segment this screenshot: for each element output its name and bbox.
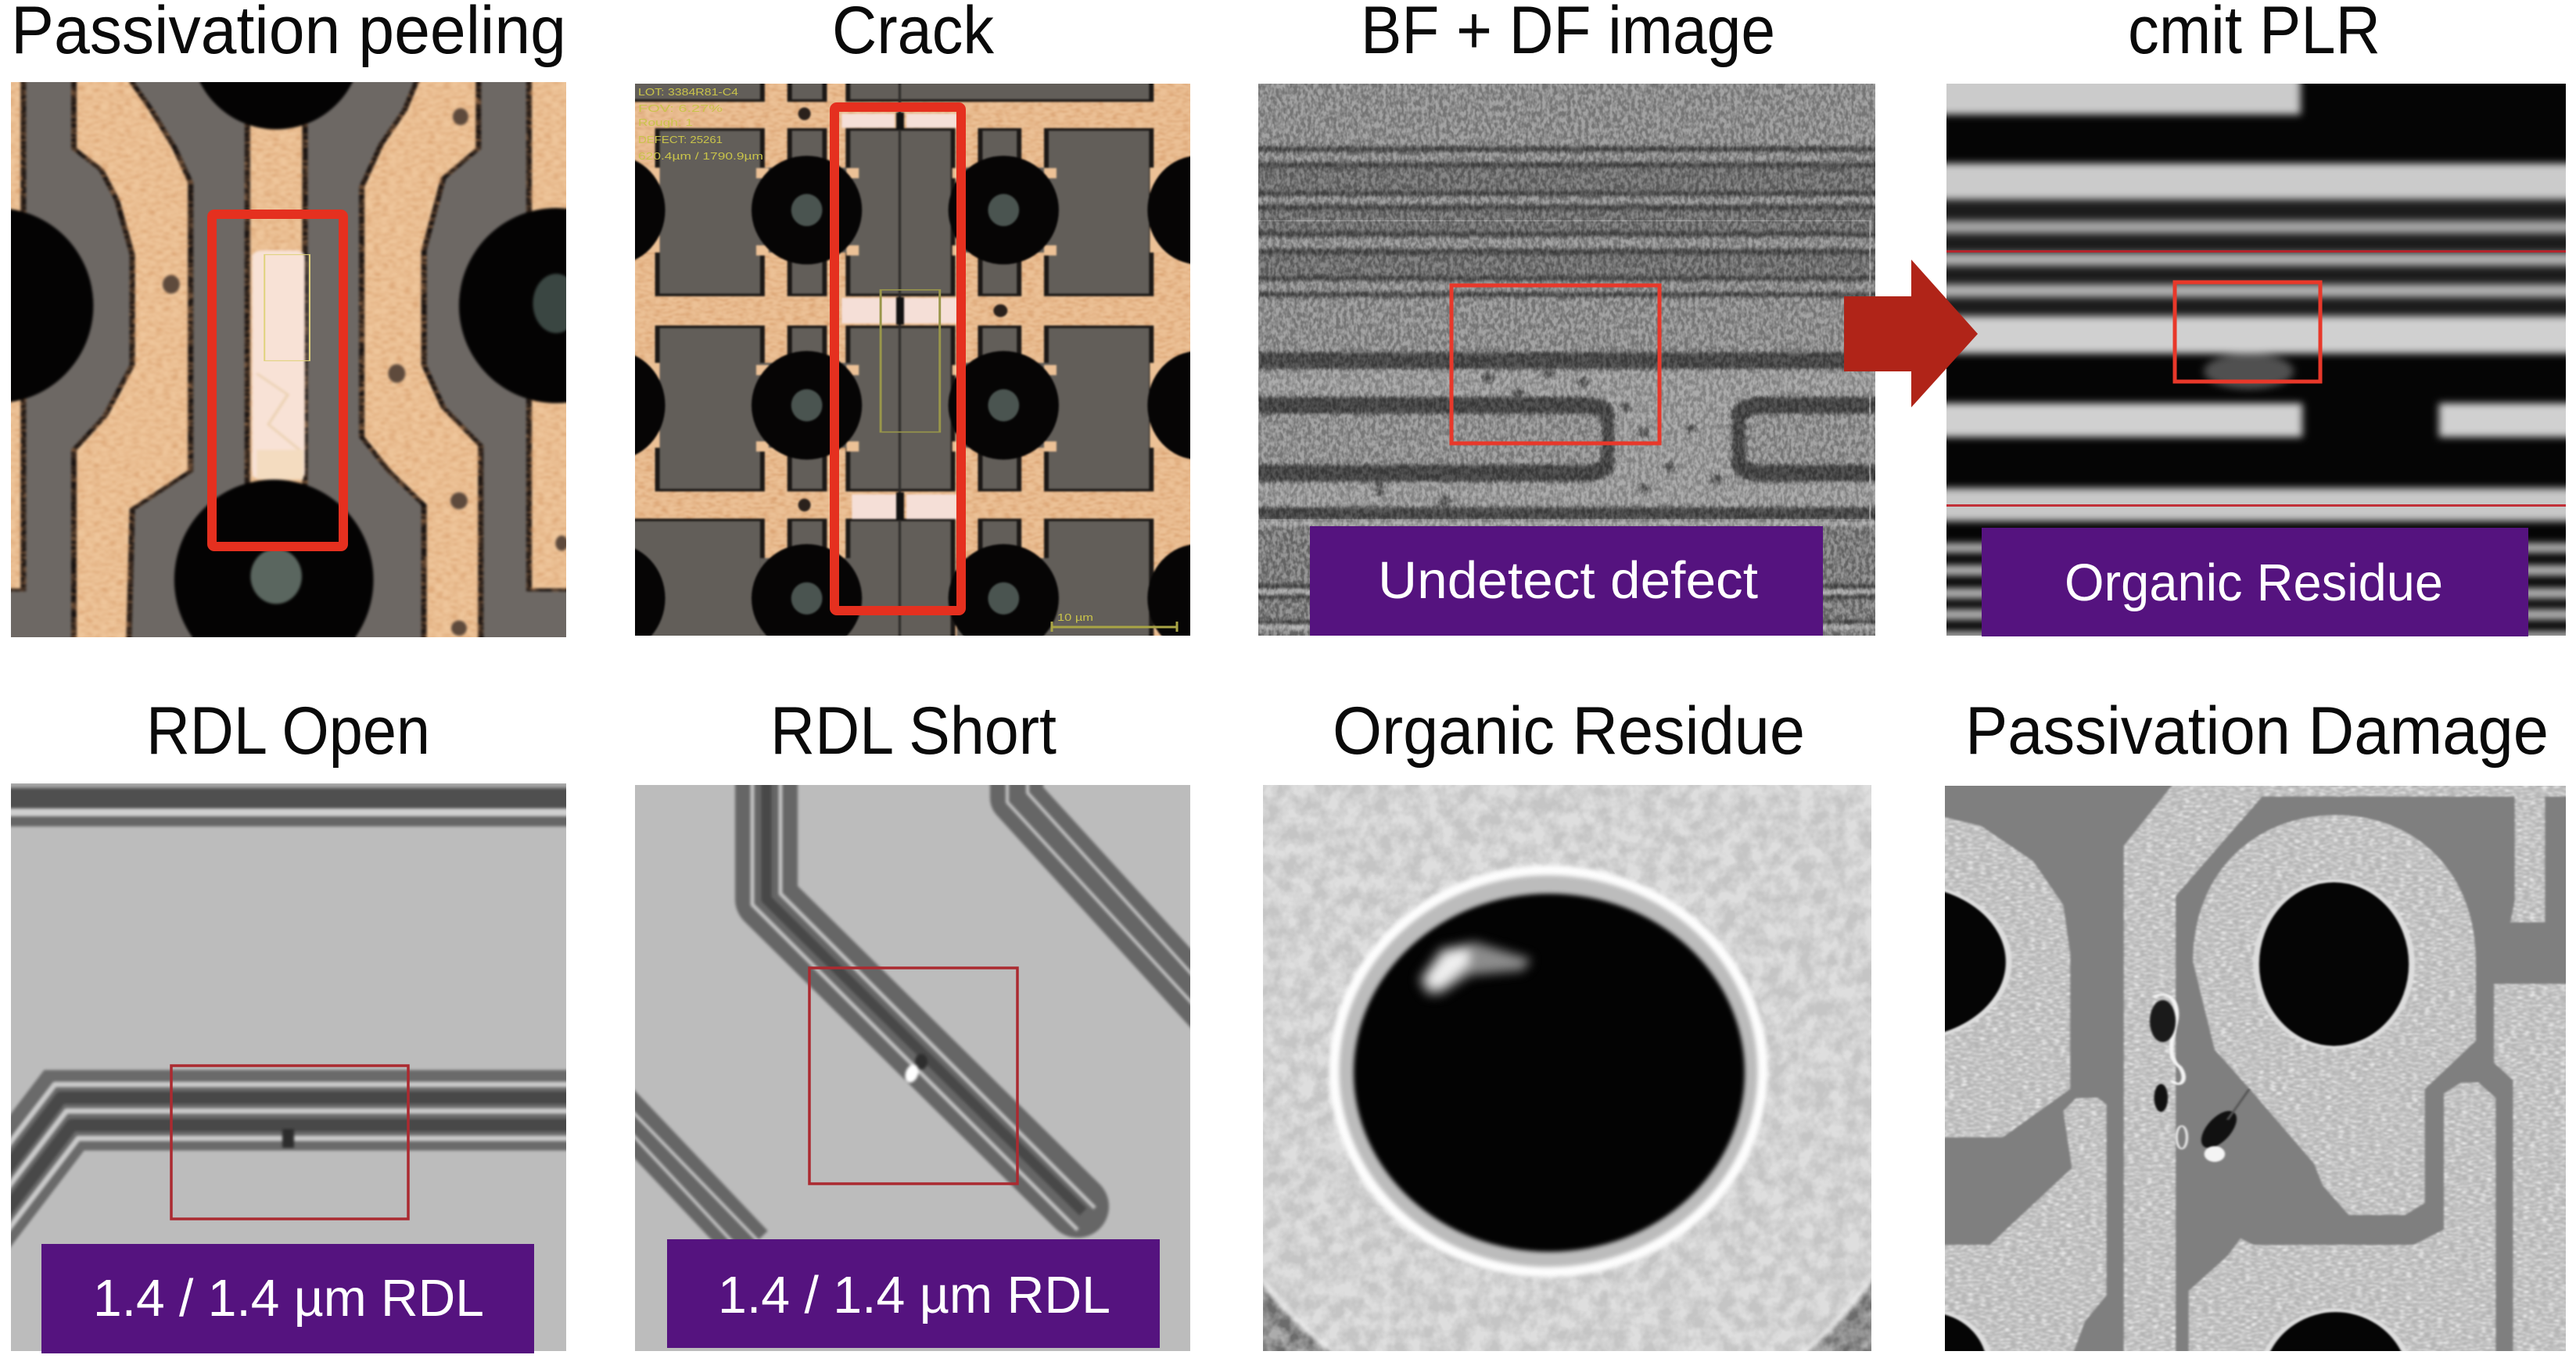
purple label: 1.4 / 1.4 µm RDL <box>41 1244 534 1353</box>
overlay: inspection metadata: DEFECT: 25261 <box>638 134 723 145</box>
red highlight box <box>212 214 343 547</box>
overlay: inspection metadata: FOV: 6.27% <box>638 102 723 114</box>
micrograph: SEM traces with damaged passivation <box>1798 769 2574 1357</box>
residue streak <box>1419 942 1531 995</box>
purple label: 1.4 / 1.4 µm RDL: 1.4 / 1.4 µm RDL <box>93 1269 484 1328</box>
micrograph: copper grid with crack line <box>635 84 1190 636</box>
passivation damage blobs <box>2150 995 2249 1162</box>
scale bar: 10 µm <box>1057 611 1093 623</box>
red reference line upper <box>1946 250 2566 253</box>
red highlight box <box>171 1066 408 1219</box>
red highlight box <box>2175 282 2320 382</box>
micrograph: copper traces with peeled passivation <box>11 82 566 637</box>
panel: RDL Short <box>610 694 1220 1359</box>
panel: cmit PLR <box>1944 5 2566 636</box>
overlay: inspection metadata: 620.4µm / 1790.9µm <box>638 150 763 162</box>
purple label: Organic Residue: Organic Residue <box>2065 554 2443 612</box>
heading: RDL Short: RDL Short <box>770 694 1057 769</box>
heading: Passivation Damage: Passivation Damage <box>1965 694 2549 769</box>
red highlight box <box>834 107 961 611</box>
arrow: from BF + DF image to cmit PLR <box>1844 260 1978 407</box>
scale bar <box>1052 611 1177 632</box>
red highlight box <box>1451 285 1659 443</box>
purple label: 1.4 / 1.4 µm RDL: 1.4 / 1.4 µm RDL <box>718 1266 1110 1324</box>
micrograph: diagonal RDL lines with short defect <box>610 766 1220 1359</box>
panel: Passivation Damage <box>1798 694 2574 1357</box>
purple label: Organic Residue <box>1982 528 2528 636</box>
panel: Organic Residue <box>1251 694 1877 1359</box>
micrograph: blurred stripes on black <box>1946 84 2566 636</box>
micrograph: bright and dark field grayscale lines <box>1258 84 1875 636</box>
red reference line lower <box>1946 504 2566 507</box>
panel: Crack <box>564 0 1249 658</box>
panel: Passivation peeling <box>11 5 566 637</box>
red highlight box <box>809 968 1017 1184</box>
micrograph: via with organic residue <box>1251 770 1877 1359</box>
heading: Organic Residue: Organic Residue <box>1333 694 1805 769</box>
panel: BF + DF image <box>1258 5 1875 636</box>
micrograph: RDL lines with open defect <box>11 783 566 1351</box>
purple label: 1.4 / 1.4 µm RDL <box>667 1239 1160 1348</box>
overlay: inspection metadata: Rough: 1 <box>638 116 693 128</box>
overlay: inspection metadata: LOT: 3384R81-C4 <box>638 86 738 98</box>
purple label: Undetect defect <box>1310 526 1823 636</box>
panel: RDL Open <box>0 694 594 1359</box>
heading: RDL Open: RDL Open <box>146 694 430 769</box>
purple label: Undetect defect: Undetect defect <box>1378 551 1758 610</box>
overlay: inspection metadata <box>638 86 763 162</box>
